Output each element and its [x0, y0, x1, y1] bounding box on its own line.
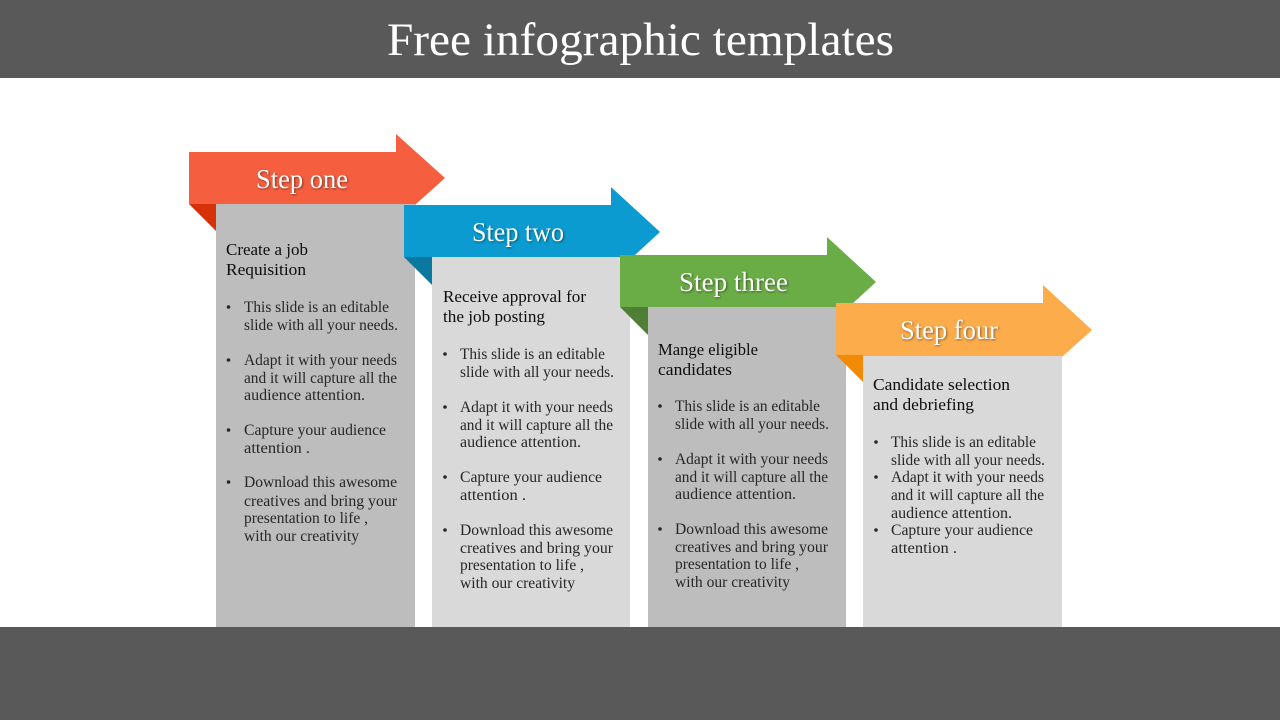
bullet list: step two: Capture your audience	[460, 469, 602, 486]
bullet list: step one: with our creativity	[244, 528, 359, 545]
bullet list: step four: Adapt it with your needs	[891, 469, 1044, 486]
heading: step three: candidates	[658, 360, 732, 379]
bullet list: step one: attention .	[244, 440, 310, 457]
heading: step two: the job posting	[443, 307, 545, 326]
panel: step four	[836, 285, 1092, 627]
bullet list: step two	[443, 346, 614, 592]
arrow: step four	[836, 285, 1092, 374]
heading: step three: Mange eligible	[658, 340, 758, 359]
bullet list: step three: with our creativity	[675, 574, 790, 591]
bullet list: step four: Capture your audience	[891, 522, 1033, 539]
heading: step three	[658, 340, 758, 379]
bullet list: step one: slide with all your needs.	[244, 317, 398, 334]
header bar	[0, 0, 1280, 78]
bullet list: step three	[658, 398, 829, 591]
arrow: step two	[404, 187, 660, 277]
heading: step one	[226, 240, 308, 279]
bullet list: step two: presentation to life ,	[460, 557, 584, 574]
bullet list: step one: and it will capture all the	[244, 370, 397, 387]
bullet list: step one: presentation to life ,	[244, 510, 368, 527]
body: step one	[216, 204, 415, 627]
fold: step three	[620, 307, 648, 335]
bullet list: step one: audience attention.	[244, 387, 365, 404]
bullet list: step two: with our creativity	[460, 575, 575, 592]
bullet list: step three: presentation to life ,	[675, 556, 799, 573]
bullet list: step four: attention .	[891, 540, 957, 557]
heading: step two: Receive approval for	[443, 287, 586, 306]
label: step four: Step four	[900, 315, 998, 345]
fold: step two	[404, 257, 432, 285]
bullet list: step three: creatives and bring your	[675, 539, 829, 556]
label: step three: Step three	[679, 267, 788, 297]
body: step three	[648, 307, 846, 627]
bullet list: step two: creatives and bring your	[460, 540, 614, 557]
heading: step two	[443, 287, 586, 326]
arrow: step three	[620, 237, 876, 327]
bullet list: step one: This slide is an editable	[244, 299, 389, 316]
bullet list: step three: Adapt it with your needs	[675, 451, 828, 468]
bullet list: step four: and it will capture all the	[891, 487, 1044, 504]
body: step four	[863, 356, 1062, 627]
heading: step one: Requisition	[226, 260, 306, 279]
bullet list: step four: This slide is an editable	[891, 434, 1036, 451]
heading: step one: Create a job	[226, 240, 308, 259]
panel: step three	[620, 237, 876, 627]
bullet list: step three: slide with all your needs.	[675, 416, 829, 433]
fold: step four	[836, 355, 863, 382]
bullet list: step one	[227, 299, 398, 545]
bullet list: step three: audience attention.	[675, 486, 796, 503]
bullet list: step one: Capture your audience	[244, 422, 386, 439]
bullet list: step four: slide with all your needs.	[891, 452, 1045, 469]
panel: step two	[404, 187, 660, 627]
bullet list: step two: slide with all your needs.	[460, 364, 614, 381]
bullet list: step two: Download this awesome	[460, 522, 613, 539]
label: step one: Step one	[256, 164, 348, 194]
bullet list: step three: This slide is an editable	[675, 398, 820, 415]
bullet list: step two: audience attention.	[460, 434, 581, 451]
heading: step four: Candidate selection	[873, 375, 1011, 394]
arrow: step one	[189, 134, 445, 222]
heading: step four: and debriefing	[873, 395, 975, 414]
bullet list: step one: Adapt it with your needs	[244, 352, 397, 369]
title: Free infographic templates	[387, 14, 894, 66]
bullet list: step two: and it will capture all the	[460, 417, 613, 434]
bullet list: step two: This slide is an editable	[460, 346, 605, 363]
bullet list: step three: and it will capture all the	[675, 469, 828, 486]
heading: step four	[873, 375, 1011, 414]
bullet list: step four: audience attention.	[891, 505, 1012, 522]
bullet list: step one: creatives and bring your	[244, 493, 398, 510]
body: step two	[432, 257, 630, 627]
bullet list: step three: Download this awesome	[675, 521, 828, 538]
bullet list: step two: attention .	[460, 487, 526, 504]
footer bar	[0, 627, 1280, 720]
bullet list: step four	[874, 434, 1045, 557]
panel: step one	[189, 134, 445, 627]
fold: step one	[189, 204, 216, 231]
label: step two: Step two	[472, 217, 564, 247]
bullet list: step two: Adapt it with your needs	[460, 399, 613, 416]
bullet list: step one: Download this awesome	[244, 474, 397, 491]
